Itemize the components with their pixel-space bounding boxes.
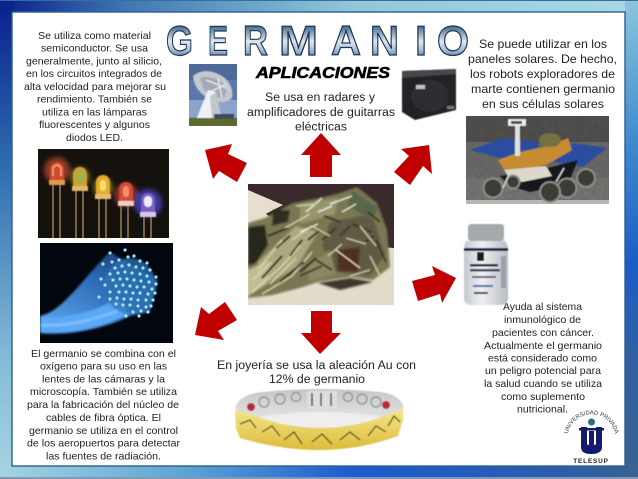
text block: sistema inmunológico — [484, 301, 602, 416]
text block: paneles solares: los robots exploradores de — [470, 67, 615, 81]
arrow: down — [301, 311, 341, 354]
text block: sistema inmunológico: un peligro potencial para — [485, 365, 601, 377]
title: GERMANIO: M — [279, 17, 318, 64]
arrow: up-right — [394, 145, 432, 185]
title: GERMANIO: A — [331, 17, 361, 64]
text block: paneles solares: marte contienen germanio — [471, 82, 615, 96]
text block: fibra óptica y lentes: para la fabricación del núcleo de — [27, 399, 179, 411]
arrow: down-left — [195, 302, 237, 340]
text block: joyería — [217, 360, 416, 386]
text block: radares y amplificadores: eléctricas — [295, 122, 347, 134]
text block: fibra óptica y lentes: lentes de las cámaras y la — [42, 374, 165, 386]
text block: semiconductor: en los circuitos integrados de — [26, 68, 162, 80]
text block: sistema inmunológico: la salud cuando se utiliza — [484, 378, 602, 390]
text block: semiconductor — [24, 30, 166, 144]
text block: radares y amplificadores: Se usa en radares y — [265, 92, 375, 104]
text block: paneles solares: Se puede utilizar en los — [479, 37, 607, 51]
text block: semiconductor: alta velocidad para mejorar su — [24, 81, 166, 93]
logo: Universidad Privada TELESUP: TELESUP — [573, 458, 609, 465]
text block: fibra óptica y lentes: El germanio se combina con el — [31, 348, 176, 360]
logo: Universidad Privada TELESUP: UNIVERSIDAD PRIVADA — [564, 410, 618, 434]
logo: Universidad Privada TELESUP — [564, 410, 618, 465]
title: GERMANIO: O — [437, 17, 469, 64]
heading: APLICACIONES: APLICACIONES — [255, 65, 391, 82]
text block: paneles solares: paneles solares. De hecho, — [468, 52, 617, 66]
text block: sistema inmunológico: está considerado como — [488, 352, 597, 364]
text block: fibra óptica y lentes: de los aeropuertos para detectar — [27, 438, 181, 450]
arrow: up-left — [205, 144, 247, 182]
text block: semiconductor: utiliza en las lámparas — [42, 106, 147, 118]
title: GERMANIO — [166, 17, 469, 64]
text block: fibra óptica y lentes: las fuentes de radiación. — [46, 450, 161, 462]
text block: semiconductor: Se utiliza como material — [38, 30, 151, 42]
arrow: right — [412, 266, 456, 303]
text block: semiconductor: semiconductor. Se usa — [41, 42, 148, 54]
photo: radar dish — [189, 64, 237, 126]
text block: semiconductor: fluorescentes y algunos — [39, 119, 150, 131]
title: GERMANIO: R — [243, 17, 268, 64]
text block: radares y amplificadores: amplificadores de guitarras — [247, 107, 395, 119]
text block: paneles solares: en sus células solares — [482, 97, 604, 111]
text block: sistema inmunológico: nutricional. — [517, 404, 568, 416]
photo: Mars rover — [466, 116, 609, 204]
text block: sistema inmunológico: como suplemento — [501, 391, 585, 403]
text block: fibra óptica y lentes: cables de fibra óptica. El — [46, 412, 161, 424]
title: GERMANIO: N — [370, 17, 399, 64]
text block: fibra óptica y lentes: germanio se utiliza en el control — [29, 425, 178, 437]
text block: sistema inmunológico: Actualmente el germanio — [484, 340, 602, 352]
title: GERMANIO: G — [166, 17, 193, 64]
photo: guitar amplifier — [402, 69, 456, 120]
arrow: up — [301, 133, 341, 177]
text block: fibra óptica y lentes: microscopía. También se utiliza — [30, 386, 177, 398]
text block: radares y amplificadores — [247, 92, 395, 134]
text block: semiconductor: generalmente, junto al silicio, — [26, 56, 162, 68]
text block: fibra óptica y lentes: oxígeno para su uso en las — [40, 360, 167, 372]
photo: fibre optics — [40, 243, 173, 343]
photo: bracelet — [235, 389, 404, 450]
text block: paneles solares — [468, 37, 617, 111]
text block: sistema inmunológico: Ayuda al sistema — [503, 301, 582, 313]
photo: LED diodes — [38, 149, 169, 238]
text block: semiconductor: rendimiento. También se — [37, 94, 152, 106]
photo: germanium mineral — [248, 184, 394, 305]
text block: semiconductor: diodos LED. — [66, 132, 123, 144]
text block: sistema inmunológico: inmunológico de — [504, 314, 581, 326]
text block: fibra óptica y lentes — [27, 348, 181, 462]
photo: supplement bottle — [464, 224, 508, 305]
text block: joyería: 12% de germanio — [269, 374, 365, 386]
text block: joyería: En joyería se usa la aleación Au con — [217, 360, 416, 372]
title: GERMANIO: E — [208, 17, 228, 64]
text block: sistema inmunológico: pacientes con cáncer. — [492, 327, 594, 339]
title: GERMANIO: I — [415, 17, 427, 64]
